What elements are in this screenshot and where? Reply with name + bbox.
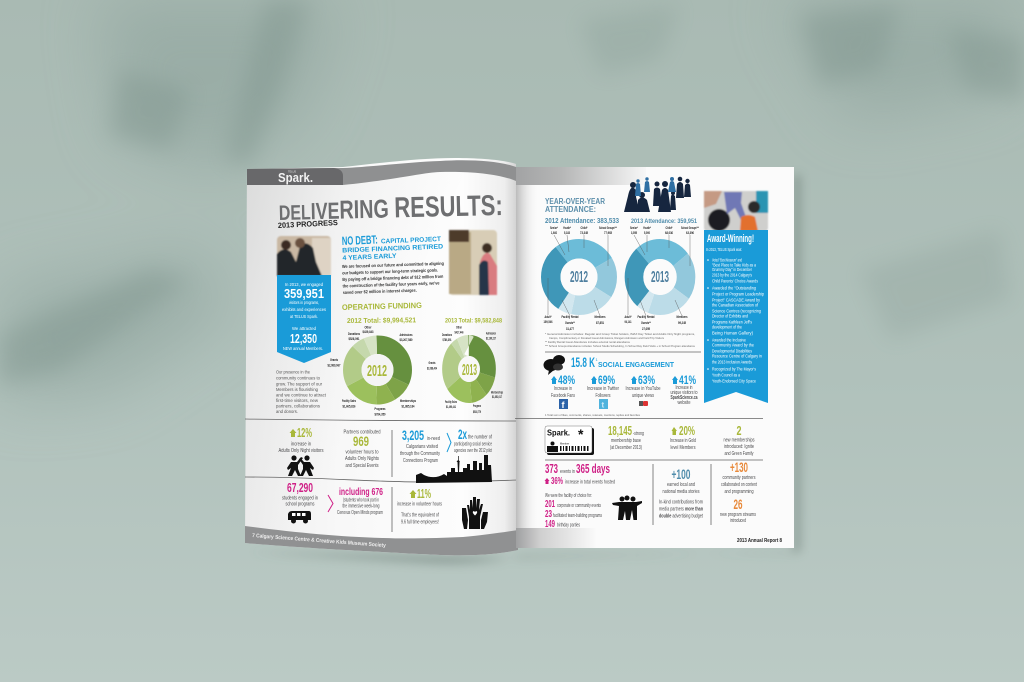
donut chart: 2013 attendance — [624, 225, 699, 331]
donut chart: 2013 attendance: 94,141 — [624, 319, 632, 324]
bottom band: right page — [516, 528, 783, 548]
heading: no debt: NO DEBT: — [342, 233, 378, 248]
stat: 12 percent — [278, 425, 324, 476]
stat: 2 new memberships: 2 — [736, 423, 742, 438]
stat: 2x agencies: participating social service — [454, 442, 492, 448]
stat: 3,205 Calgarians: Connections Program — [403, 458, 438, 464]
right page — [515, 167, 794, 548]
heading: social engagement: 15.8 K — [571, 354, 595, 370]
stat: 373 events in 365 days: 201 — [545, 499, 555, 510]
donut chart: 2012 attendance: 2012 — [570, 269, 588, 286]
callout: attendance ribbon: We attracted — [292, 326, 316, 331]
panel: award-winning ribbon: Director of Exhibits and — [712, 314, 748, 318]
stat: 373 events in 365 days: 365 days — [576, 461, 610, 476]
stat: 2 new memberships: new memberships — [724, 438, 755, 444]
heading: no debt — [342, 230, 444, 262]
stat: 3,205 Calgarians: Calgarians visited — [406, 444, 438, 450]
stat: 48 percent facebook: Facebook Fans — [551, 393, 575, 399]
donut chart: 2013 funding — [427, 324, 503, 414]
donut chart: 2012 funding: $3,267,580 — [400, 337, 413, 342]
donut chart: 2012 attendance: Members — [594, 314, 606, 319]
stat: 373 events in 365 days: 36% — [551, 476, 563, 487]
donut chart: 2013 attendance: 68,036 — [665, 230, 674, 235]
stat: 373 events in 365 days: We were the facility of choice for: — [545, 493, 592, 499]
text block: community presence: and donors. — [276, 409, 298, 414]
stat: +130 community partners: +130 — [730, 459, 748, 475]
panel: award-winning ribbon: Being Human Gallery) — [712, 330, 754, 336]
donut chart: 2012 attendance: Child* — [580, 225, 588, 230]
donut chart: 2013 attendance: Senior* — [630, 225, 638, 230]
heading: no debt: BRIDGE FINANCING RETIRED — [342, 243, 444, 254]
arrow: blue chevron — [447, 433, 451, 452]
donut chart: 2012 attendance: Senior* — [550, 225, 558, 230]
text block: community presence: partners, collaborations — [276, 404, 321, 408]
footnote: social sum: 1 Total sum of likes, comments, shares, retweets, mentions, replies and favorites — [545, 413, 641, 417]
donut chart: 2012 funding: $1,885,184 — [402, 404, 415, 408]
donut chart: 2012 funding: Grants — [330, 357, 338, 362]
callout: attendance ribbon — [277, 275, 331, 363]
stat: 2 new memberships: introduced: Ignite — [724, 444, 754, 450]
stat: 41 percent website: Increase in — [676, 385, 693, 391]
text block: no debt body: By paying off a bridge financing debt of $12 million from — [342, 274, 443, 282]
donut chart: 2012 funding: Other — [364, 324, 372, 330]
text block: no debt body: the construction of the facility four years early, we've — [342, 280, 440, 288]
panel: award-winning ribbon: development of the — [712, 324, 742, 330]
donut chart: 2012 attendance: Facility Rental — [562, 314, 578, 319]
donut chart: 2013 funding: Donations — [442, 332, 452, 337]
panel: award-winning ribbon: the Canadian Association of — [712, 302, 759, 308]
stat: +130 community partners: introduced — [730, 518, 746, 524]
stat: 373 events in 365 days: 373 — [545, 461, 558, 476]
stat: 3,205 Calgarians — [400, 427, 440, 464]
left page — [245, 158, 518, 555]
panel: award-winning ribbon: Project" CASCADE Award by — [712, 298, 761, 302]
stat: 969 volunteer hours: 969 — [353, 433, 369, 449]
stat: +100 media stories: media partners more than — [659, 506, 703, 512]
stat: 11 percent: That's the equivalent of — [401, 512, 439, 518]
bottom band: left page: 7 Calgary Science Centre & Creative Kids Museum Society — [252, 533, 386, 549]
text block: community presence: and we continue to attract — [276, 392, 327, 398]
donut chart: 2013 attendance: Child* — [666, 225, 673, 230]
stat: 2x agencies: the number of — [468, 434, 492, 440]
text block: community presence: grow. The support of our — [276, 382, 322, 386]
stat: 373 events in 365 days: events in — [560, 469, 575, 475]
text block: community presence: first-time visitors, new — [276, 398, 319, 403]
stat: 69 percent twitter: 69% — [598, 373, 615, 387]
panel: award-winning ribbon: Developmental Disabilities — [712, 348, 752, 354]
stat: 373 events in 365 days: birthday parties — [557, 522, 580, 528]
callout: attendance ribbon: In 2013, we engaged — [285, 282, 323, 287]
donut chart: 2012 attendance: Adult* — [544, 314, 552, 319]
donut chart: 2012 attendance — [544, 225, 617, 331]
footnotes — [545, 332, 695, 348]
icon: chat bubbles — [544, 355, 565, 375]
heading: social engagement: SOCIAL ENGAGEMENT — [598, 360, 674, 369]
stat: +100 media stories: earned local and — [667, 482, 695, 488]
stat: 67,290 students: students engaged in — [282, 496, 318, 502]
donut chart: 2013 attendance: Youth* — [643, 225, 651, 230]
photo: hug at exhibit — [449, 230, 497, 295]
stat: 373 events in 365 days: 149 — [545, 519, 555, 530]
stat: +100 media stories: double advertising budget — [659, 514, 703, 520]
stat: 373 events in 365 days: 23 — [545, 509, 552, 520]
donut chart: 2013 attendance: Facility Rental — [638, 314, 654, 319]
donut chart: 2013 attendance: 27,695 — [642, 326, 651, 331]
spark tab: Spark. — [278, 170, 313, 185]
panel: award-winning ribbon: "Best Place to Take Kids as a — [712, 262, 756, 268]
stat: 3,205 Calgarians: 3,205 — [402, 427, 424, 443]
stat: 67,290 students: 67,290 — [287, 480, 313, 495]
text block: community presence: Our presence in the — [276, 370, 310, 374]
donut chart: 2012 funding: $2,089,067 — [328, 362, 341, 368]
stat: 41 percent website: unique visitors to — [670, 390, 698, 396]
bottom band: left page — [245, 526, 518, 555]
icon: twitter: t — [602, 400, 604, 410]
donut chart: 2013 funding: Facility Sales — [445, 399, 457, 404]
panel: award-winning ribbon: Youth-Endorsed City Space — [712, 378, 757, 384]
panel: award-winning ribbon: Project or Program Leadership — [712, 292, 765, 296]
stat: +130 community partners: community partners — [722, 475, 756, 481]
panel: award-winning ribbon: In 2013, TELUS Spark was: — [706, 247, 742, 252]
stat: 2 new memberships — [724, 423, 755, 457]
icon: school bus — [288, 511, 311, 524]
stat: 373 events in 365 days: corporate or community events — [557, 503, 601, 509]
callout: attendance ribbon: NEW annual Members. — [283, 346, 323, 351]
panel: award-winning ribbon: Programs Kathleen Jeff's — [712, 320, 752, 324]
stat: 69 percent twitter: Increase in Twitter — [587, 386, 619, 392]
stat: 373 events in 365 days: facilitated team-building programs — [553, 513, 602, 519]
donut chart: 2013 attendance: 99,245 — [678, 320, 687, 325]
panel: award-winning ribbon: Science Centres (recognizing — [712, 308, 762, 314]
panel: award-winning ribbon — [704, 191, 768, 403]
donut chart: 2013 funding: $1,851,017 — [492, 394, 502, 399]
donut chart: 2012 funding: $439,843 — [362, 329, 374, 334]
donut chart: 2012 funding: Admissions — [400, 332, 413, 337]
donut chart: 2012 attendance: School Groups*** — [599, 225, 617, 230]
heading: 2013 total: 2013 Total: $9,582,848 — [445, 318, 503, 324]
stat: 2 new memberships: and Green Family — [724, 451, 754, 457]
callout: attendance ribbon: 359,951 — [284, 286, 324, 301]
donut chart: 2013 funding: 2013 — [462, 362, 477, 379]
donut chart: 2013 funding: $2,088,404 — [427, 366, 437, 370]
stat: 969 volunteer hours: Partners contributed — [344, 430, 381, 436]
donut chart: 2012 funding — [328, 324, 416, 416]
icon: youtube — [639, 401, 648, 406]
top band: right page — [516, 167, 646, 185]
stat: 20 percent gold: Increase in Gold — [670, 438, 696, 444]
stat: 18,145 members: membership base — [611, 438, 641, 444]
callout: attendance ribbon: at TELUS Spark. — [290, 314, 318, 319]
stat: 3,205 Calgarians: in-need — [427, 436, 440, 442]
stat: including 676: the immersive week-long — [342, 504, 380, 510]
heading: year over year attendance: YEAR-OVER-YEAR — [545, 197, 605, 206]
stat: 969 volunteer hours: and Special Events — [346, 463, 379, 469]
text block: no debt body: our budgets to support our long-term strategic goals. — [342, 267, 438, 275]
text block: community presence: Members is flourishing — [276, 387, 318, 392]
text block: community presence: community continues to — [276, 376, 320, 380]
donut chart: 2013 funding: $1,490,441 — [446, 404, 456, 409]
spark tab — [247, 168, 343, 185]
subtitle: 2013 PROGRESS — [278, 218, 338, 230]
donut chart: 2013 attendance: Adult* — [624, 314, 632, 319]
panel: award-winning ribbon: Child Parents' Choice Awards — [712, 278, 758, 284]
heading: 2012 attendance: 2012 Attendance: 383,533 — [545, 218, 619, 225]
text block: no debt body: saved over $2 million in interest charges. — [343, 288, 417, 295]
callout: attendance ribbon: exhibits and experiences — [282, 307, 327, 312]
panel: award-winning ribbon: Voted "Best Museum" and — [712, 258, 742, 262]
stat: 41 percent website: 41% — [679, 373, 696, 387]
stat: +130 community partners — [720, 459, 757, 524]
book drop shadow — [248, 172, 800, 563]
stat: 41 percent website — [670, 373, 698, 406]
spark tab: TELUS — [288, 170, 296, 174]
bottom band: right page: 2013 Annual Report 8 — [737, 538, 783, 544]
stat: 67,290 students — [282, 480, 318, 524]
icon: calgary skyline — [416, 455, 492, 483]
stat: 20 percent gold: 20% — [679, 423, 695, 438]
donut chart: 2013 attendance: 3,055 — [631, 230, 637, 235]
icon: facebook: f — [562, 400, 566, 410]
title: DELIVERING RESULTS: — [278, 190, 503, 227]
left page: Memberships — [491, 390, 503, 394]
stat: 969 volunteer hours: Adults Only Nights — [345, 456, 379, 462]
stat: 18,145 members — [608, 423, 644, 451]
heading: 2013 attendance: 2013 Attendance: 359,951 — [631, 218, 697, 225]
icon: membership card: * — [578, 426, 584, 442]
stat: 3,205 Calgarians: through the Community — [400, 451, 440, 457]
panel: award-winning ribbon: Awarded the "Outstanding — [712, 286, 757, 290]
donut chart: 2012 funding: Donations — [348, 331, 360, 336]
stat: 12 percent: increase in — [291, 442, 311, 448]
icon: group of friends — [612, 496, 642, 520]
panel: award-winning ribbon: Recognized by The Mayor's — [712, 366, 756, 372]
donut chart: 2013 funding: Grants — [428, 360, 436, 365]
callout: attendance ribbon: 12,350 — [290, 331, 317, 346]
stat: 63 percent youtube — [626, 373, 661, 406]
footnotes: ** Facility Rental Guest Attendance includes external rental attendance — [545, 340, 630, 344]
stat: 373 events in 365 days: increase in total events hosted — [565, 480, 615, 486]
donut chart: 2013 attendance: 63,396 — [686, 230, 695, 235]
stat: +130 community partners: new program streams — [720, 512, 756, 518]
donut chart: 2013 attendance: Guests** — [641, 320, 651, 325]
stat: including 676: including 676 — [339, 487, 383, 498]
donut chart: 2012 funding: Facility Sales — [342, 398, 356, 403]
icon: crowd silhouettes — [624, 177, 691, 212]
stat: 18,145 members: 18,145 — [608, 423, 632, 438]
text block: no debt body — [342, 261, 445, 295]
donut chart: 2012 attendance: 1,666 — [551, 230, 557, 235]
icon: membership card: Member — [560, 442, 569, 446]
stat: +130 community partners: and programming — [724, 489, 754, 495]
stat: 41 percent website: website — [678, 400, 691, 406]
heading: social engagement — [571, 354, 674, 370]
heading: operating funding: OPERATING FUNDING — [342, 301, 422, 312]
icon: high five people — [287, 455, 314, 476]
donut chart: 2012 attendance: 5,183 — [564, 230, 570, 235]
donut chart: 2012 attendance: Guests** — [565, 320, 575, 325]
panel: award-winning ribbon: Youth Council as a — [712, 372, 740, 378]
donut chart: 2013 funding: $518,779 — [473, 409, 481, 414]
heading: no debt: CAPITAL PROJECT — [381, 236, 441, 245]
donut chart: 2012 funding: 2012 — [367, 363, 387, 380]
arrow: magenta chevron — [328, 495, 333, 512]
heading: social engagement: 1 — [596, 357, 598, 362]
photo: child with bicycle — [704, 191, 768, 231]
icon: raised hands with hearts — [462, 497, 488, 529]
heading: no debt: 4 YEARS EARLY — [342, 253, 397, 262]
stat: 11 percent: 11% — [417, 486, 431, 501]
stat: including 676: Cenovus Open Minds program — [337, 510, 383, 516]
stat: +100 media stories: In-kind contributions from — [659, 500, 703, 506]
donut chart: 2012 attendance: 77,965 — [604, 230, 613, 235]
stat: +130 community partners: collaborated on content — [721, 482, 757, 488]
donut chart: 2013 attendance: 2013 — [651, 269, 669, 286]
stat: 11 percent: 9.6 full time employees! — [401, 520, 439, 526]
stat: 18,145 members: (at December 2013) — [610, 445, 642, 451]
panel: award-winning ribbon: Awarded the Inclusive — [712, 338, 746, 342]
stat: 20 percent gold — [670, 423, 696, 451]
stat: +100 media stories: +100 — [672, 466, 691, 482]
stat: +100 media stories — [659, 466, 703, 520]
donut chart: 2013 attendance: 5,000 — [644, 230, 650, 235]
stat: 11 percent: increase in volunteer hours — [397, 502, 442, 508]
stat: 2x agencies: 2x — [458, 426, 467, 442]
donut chart: 2012 attendance: 31,477 — [566, 326, 575, 331]
donut chart: 2013 funding: $417,446 — [454, 330, 464, 334]
stat: 63 percent youtube: Increase in YouTube — [626, 386, 661, 392]
stat: 11 percent — [397, 486, 442, 526]
stat: 12 percent: Adults Only Night visitors — [278, 448, 324, 454]
stat: 48 percent facebook: Increase in — [554, 386, 572, 392]
donut chart: 2012 funding: $784,350 — [374, 412, 386, 416]
stat: 63 percent youtube: 63% — [638, 373, 655, 387]
stat: 63 percent youtube: unique views — [632, 393, 654, 399]
text block: community presence — [276, 370, 327, 414]
stat: 373 events in 365 days — [544, 461, 615, 530]
donut chart: 2012 attendance: 109,546 — [544, 319, 553, 324]
heading: 2012 total: 2012 Total: $9,994,521 — [347, 317, 416, 325]
stat: +130 community partners: 26 — [734, 496, 743, 512]
donut chart: 2012 funding: Memberships — [400, 398, 416, 403]
heading: year over year attendance: ATTENDANCE: — [545, 205, 596, 214]
stat: 69 percent twitter — [587, 373, 619, 410]
donut chart: 2012 attendance: 73,345 — [580, 230, 589, 235]
donut chart: 2012 funding: Programs — [374, 406, 386, 411]
icon: membership card — [545, 426, 594, 455]
icon: membership card: Spark. — [547, 428, 570, 438]
footnotes: *** School Groups Attendance includes: School Studio Scheduling, In School Day Field Visits + in School Program attendance — [545, 344, 695, 348]
stat: 969 volunteer hours: volunteer hours to — [346, 450, 379, 456]
donut chart: 2012 funding: $528,091 — [348, 336, 360, 341]
donut chart: 2013 funding: $2,190,227 — [486, 336, 496, 340]
donut chart: 2012 attendance: 87,851 — [596, 320, 605, 325]
stat: +100 media stories: national media stories — [662, 489, 700, 495]
stat: including 676 — [337, 487, 383, 516]
photo: visitors — [277, 236, 331, 276]
donut chart: 2013 funding: Admission — [486, 330, 496, 336]
callout: attendance ribbon: visitors in programs, — [289, 300, 319, 305]
footnotes: * General Admission includes: Regular and Group Ticket holders, IMAX Day Ticket and Adults Only Night programs, — [545, 332, 695, 336]
stat: 2x agencies: agencies over the 2012 pilot — [454, 448, 492, 454]
panel: award-winning ribbon: the 2013 Inclusion Awards — [712, 360, 752, 364]
panel: award-winning ribbon: 2013 by the 2014 Calgary's — [712, 272, 752, 278]
donut chart: 2013 attendance: Members — [676, 314, 688, 319]
stat: 12 percent: 12% — [297, 425, 312, 440]
donut chart: 2012 attendance: Youth* — [563, 225, 571, 230]
stat: 18,145 members: -strong — [633, 431, 644, 437]
stat: 48 percent facebook: 48% — [558, 373, 575, 387]
donut chart: 2013 funding: Program — [473, 403, 481, 408]
stat: 67,290 students: school programs — [286, 502, 315, 508]
donut chart: 2012 funding: $1,665,826 — [342, 404, 356, 408]
text block: no debt body: We are focused on our future and committed to aligning — [342, 261, 444, 269]
stat: 2x agencies — [454, 426, 492, 454]
panel: award-winning ribbon: Award-Winning! — [707, 233, 754, 245]
heading: year over year attendance — [545, 197, 605, 214]
top band: left page — [247, 160, 516, 185]
footnotes: Camps, Complimentary or Donated Guest Admissions, Rangers Admission and Field Trip Visitors — [549, 336, 665, 340]
stat: including 676: (students who took part in — [343, 498, 379, 504]
donut chart: 2013 attendance: School Groups*** — [681, 225, 699, 230]
stat: 969 volunteer hours — [344, 430, 381, 469]
stat: 48 percent facebook — [551, 373, 575, 410]
panel: award-winning ribbon: Resource Centre of Calgary in — [712, 354, 763, 358]
donut chart: 2013 funding: $786,391 — [442, 337, 452, 342]
stat: 20 percent gold: level Members — [670, 445, 696, 451]
donut chart: 2013 funding: Other — [456, 324, 462, 330]
panel: award-winning ribbon: Grummy Day" in December — [712, 267, 752, 272]
stat: 41 percent website: SparkScience.ca — [670, 395, 698, 401]
panel: award-winning ribbon: Community Award by the — [712, 342, 755, 348]
stat: 69 percent twitter: Followers — [596, 393, 611, 399]
